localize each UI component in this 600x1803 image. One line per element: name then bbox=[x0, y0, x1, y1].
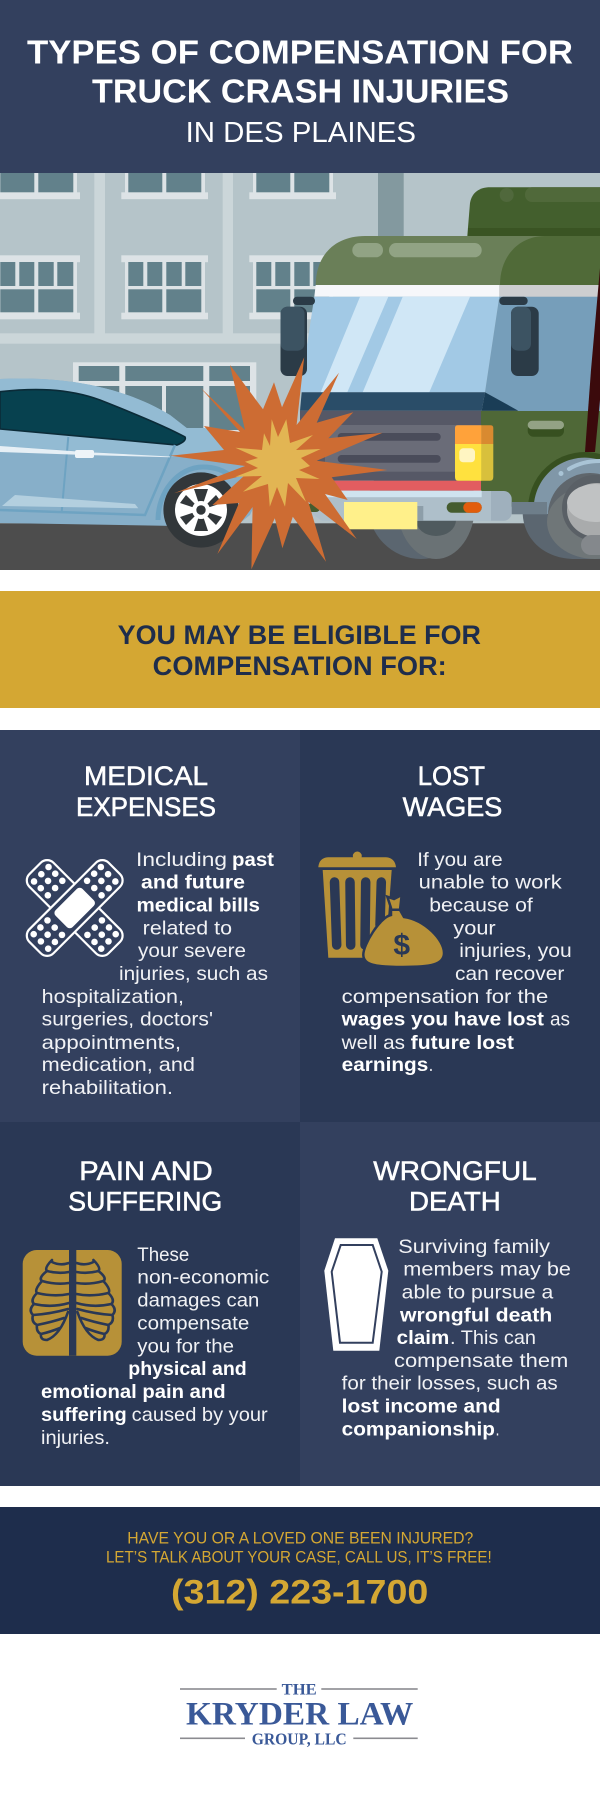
text: lost wages: future lost bbox=[411, 1032, 515, 1054]
text: lost wages: because of bbox=[429, 895, 533, 917]
text: pain and suffering: you for the bbox=[137, 1335, 234, 1357]
text: medical expenses bbox=[42, 849, 275, 1099]
door handle bbox=[75, 450, 94, 458]
text: wrongful death: members may be bbox=[403, 1259, 571, 1281]
heading: wrongful death: WRONGFUL bbox=[373, 1156, 537, 1186]
text: lost wages: injuries, you bbox=[459, 940, 572, 962]
icon: rib cage bbox=[23, 1250, 122, 1356]
windshield bbox=[300, 297, 499, 392]
text: lost wages bbox=[341, 849, 572, 1076]
text: medical expenses: your severe bbox=[138, 940, 246, 962]
banner heading: COMPENSATION FOR: bbox=[153, 651, 447, 681]
beltline highlight bbox=[0, 446, 170, 457]
icon: coffin bbox=[324, 1238, 388, 1351]
title: TYPES OF COMPENSATION FOR bbox=[27, 33, 573, 70]
truck bbox=[280, 236, 600, 559]
text: lost wages: If you are bbox=[417, 849, 503, 871]
headlight bbox=[455, 425, 493, 481]
call to action text: LET’S TALK ABOUT YOUR CASE, CALL US, IT’S FREE! bbox=[106, 1548, 492, 1566]
heading: lost wages: WAGES bbox=[403, 792, 502, 822]
cab side window bbox=[485, 297, 600, 411]
rear wheel bbox=[523, 452, 600, 559]
text: lost wages: . bbox=[429, 1054, 433, 1076]
text: medical expenses: and future bbox=[141, 872, 245, 894]
text: pain and suffering: These bbox=[137, 1244, 189, 1266]
text: wrongful death: able to pursue a bbox=[402, 1282, 553, 1304]
text: lost wages: wages you have lost bbox=[341, 1009, 545, 1031]
illustration: truck and car crash scene bbox=[0, 173, 600, 570]
text: wrongful death bbox=[342, 1236, 571, 1441]
heading: wrongful death bbox=[373, 1156, 537, 1217]
text: medical expenses: related to bbox=[143, 918, 232, 940]
cab roof bbox=[316, 236, 600, 285]
icon: trash can and money bag: $ bbox=[393, 929, 410, 962]
call to action text bbox=[106, 1529, 492, 1566]
hood band bbox=[300, 392, 485, 411]
text: lost wages: earnings bbox=[342, 1054, 428, 1076]
text: lost wages: well as bbox=[341, 1032, 405, 1054]
panel: pain and suffering bbox=[0, 1122, 300, 1486]
text: medical expenses: medical bills bbox=[136, 895, 260, 917]
panel: lost wages bbox=[300, 730, 600, 1122]
trailer bbox=[467, 187, 600, 236]
explosion bbox=[170, 357, 387, 569]
bumper bbox=[300, 491, 547, 521]
reflection bbox=[2, 495, 138, 508]
text: wrongful death: . This can bbox=[450, 1327, 536, 1349]
text: pain and suffering: compensate bbox=[137, 1313, 249, 1335]
text: medical expenses: Including bbox=[136, 849, 227, 871]
text: pain and suffering: injuries. bbox=[41, 1427, 110, 1449]
text: medical expenses: rehabilitation. bbox=[42, 1077, 173, 1099]
text: medical expenses: appointments, bbox=[42, 1032, 181, 1054]
phone number: (312) 223-1700 bbox=[171, 1573, 428, 1611]
door handle bbox=[528, 421, 564, 437]
text: wrongful death: Surviving family bbox=[398, 1236, 550, 1258]
text: medical expenses: past bbox=[232, 849, 275, 871]
text: wrongful death: . bbox=[496, 1419, 500, 1441]
text: wrongful death: wrongful death bbox=[399, 1305, 552, 1327]
logo: The Kryder Law Group, LLC bbox=[180, 1682, 418, 1749]
heading: lost wages: LOST bbox=[418, 761, 485, 791]
truck front wheel bbox=[368, 451, 475, 559]
text: medical expenses: injuries, such as bbox=[119, 963, 268, 985]
text: medical expenses: hospitalization, bbox=[42, 986, 184, 1008]
right mirror bbox=[499, 297, 539, 376]
heading: pain and suffering: PAIN AND bbox=[79, 1156, 213, 1186]
header panel bbox=[0, 0, 600, 173]
text: pain and suffering: damages can bbox=[137, 1290, 259, 1312]
truck body side bbox=[481, 411, 600, 507]
left mirror bbox=[280, 297, 315, 376]
text: medical expenses: surgeries, doctors' bbox=[42, 1009, 213, 1031]
panel: medical expenses bbox=[0, 730, 300, 1122]
red stripe bbox=[300, 481, 481, 491]
text: lost wages: as bbox=[550, 1009, 570, 1031]
door lines bbox=[0, 437, 232, 520]
eligibility banner bbox=[0, 591, 600, 708]
text: pain and suffering: caused by your bbox=[132, 1404, 268, 1426]
text: pain and suffering: physical and bbox=[128, 1358, 247, 1380]
grille bbox=[300, 411, 481, 481]
call to action panel bbox=[0, 1507, 600, 1634]
heading: medical expenses bbox=[76, 761, 216, 822]
text: pain and suffering: non-economic bbox=[137, 1267, 270, 1289]
logo: The Kryder Law Group, LLC: GROUP, LLC bbox=[252, 1730, 347, 1749]
road bbox=[0, 523, 600, 570]
visor strip bbox=[314, 285, 499, 297]
banner heading bbox=[118, 620, 481, 681]
panel: wrongful death bbox=[300, 1122, 600, 1486]
text: lost wages: unable to work bbox=[419, 872, 562, 894]
banner heading: YOU MAY BE ELIGIBLE FOR bbox=[118, 620, 481, 650]
text: wrongful death: lost income and bbox=[342, 1396, 501, 1418]
logo: The Kryder Law Group, LLC: THE bbox=[282, 1682, 317, 1699]
building background bbox=[0, 173, 600, 525]
logo: The Kryder Law Group, LLC: KRYDER LAW bbox=[186, 1697, 413, 1733]
text: wrongful death: for their losses, such as bbox=[342, 1373, 558, 1395]
title: IN DES PLAINES bbox=[186, 117, 416, 149]
heading: pain and suffering: SUFFERING bbox=[68, 1187, 222, 1217]
text: wrongful death: compensate them bbox=[394, 1350, 568, 1372]
call to action text: HAVE YOU OR A LOVED ONE BEEN INJURED? bbox=[127, 1529, 473, 1547]
icon: trash can and money bag bbox=[318, 852, 444, 967]
icon: bandages bbox=[23, 856, 126, 960]
rear post bbox=[585, 268, 600, 452]
car window bbox=[0, 390, 185, 445]
small lamp behind explosion bbox=[314, 458, 324, 464]
heading: medical expenses: EXPENSES bbox=[76, 792, 216, 822]
text: wrongful death: companionship bbox=[342, 1419, 495, 1441]
text: lost wages: can recover bbox=[455, 963, 565, 985]
text: wrongful death: claim bbox=[397, 1327, 449, 1349]
car wheel bbox=[163, 472, 239, 548]
license plate bbox=[344, 502, 417, 529]
heading: medical expenses: MEDICAL bbox=[84, 761, 208, 791]
title bbox=[27, 33, 573, 149]
heading: pain and suffering bbox=[68, 1156, 222, 1217]
text: pain and suffering bbox=[41, 1244, 270, 1449]
heading: lost wages bbox=[403, 761, 502, 822]
text: medical expenses: medication, and bbox=[42, 1054, 195, 1076]
text: pain and suffering: suffering bbox=[41, 1404, 127, 1426]
heading: wrongful death: DEATH bbox=[409, 1187, 501, 1217]
text: pain and suffering: emotional pain and bbox=[41, 1381, 226, 1403]
text: lost wages: your bbox=[453, 918, 496, 940]
car bbox=[0, 378, 257, 548]
text: lost wages: compensation for the bbox=[342, 986, 548, 1008]
title: TRUCK CRASH INJURIES bbox=[92, 72, 509, 110]
